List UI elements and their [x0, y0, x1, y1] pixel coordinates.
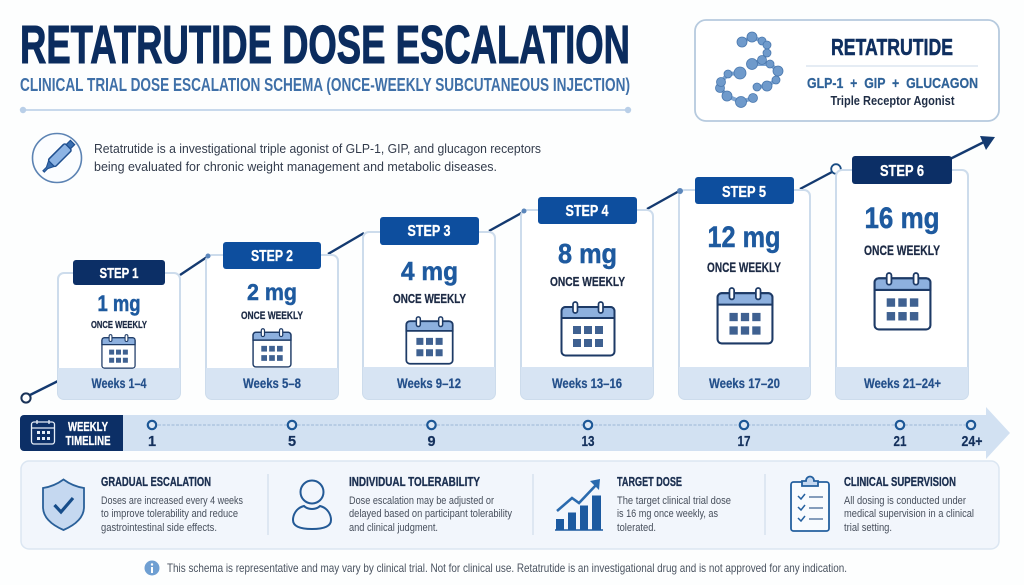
timeline label: WEEKLY	[68, 419, 108, 434]
block: clinical supervision: All dosing is conducted under	[844, 495, 966, 507]
block: clinical supervision	[844, 475, 974, 534]
timeline label	[20, 415, 123, 451]
step card 2: 2 mg	[247, 279, 297, 305]
step card 5	[677, 177, 810, 399]
block: clinical supervision: CLINICAL SUPERVISION	[844, 475, 956, 489]
icon: clipboard checklist	[791, 476, 829, 531]
step card 3: 4 mg	[401, 256, 458, 286]
timeline label: TIMELINE	[66, 433, 111, 448]
intro text	[94, 141, 541, 174]
step card 1: Weeks 1–4	[92, 376, 147, 391]
step card 6: Weeks 21–24+	[864, 376, 941, 391]
block: target dose	[617, 475, 731, 534]
step card 3: STEP 3	[408, 223, 451, 240]
step card 4: Weeks 13–16	[552, 376, 622, 391]
weekly timeline: 9	[427, 434, 436, 450]
step card 2	[206, 242, 338, 399]
icon: calendar	[875, 273, 930, 329]
icon: calendar	[253, 329, 291, 367]
block: gradual escalation	[101, 475, 243, 534]
panel: molecule card	[695, 20, 999, 121]
step card 1: STEP 1	[100, 265, 138, 282]
header divider	[20, 107, 631, 113]
step card 5: 12 mg	[708, 221, 780, 254]
block: gradual escalation: to improve tolerability and reduce	[101, 508, 238, 520]
block: individual tolerability: and clinical judgment.	[349, 522, 438, 534]
intro text: being evaluated for chronic weight management and metabolic diseases.	[94, 159, 497, 174]
panel: key considerations	[21, 461, 999, 549]
panel: molecule card: GLP-1 + GIP + GLUCAGON	[807, 75, 978, 92]
icon: shield	[43, 480, 84, 530]
step card 6	[836, 156, 968, 399]
icon: info	[144, 560, 160, 576]
step card 2: ONCE WEEKLY	[241, 310, 304, 322]
step card 3: ONCE WEEKLY	[393, 291, 466, 306]
step card 2: STEP 2	[251, 248, 293, 265]
weekly timeline	[20, 407, 1010, 459]
icon: calendar	[562, 302, 614, 356]
block: individual tolerability: delayed based on participant tolerability	[349, 508, 512, 520]
escalation path arrow	[21, 136, 995, 403]
weekly timeline: 1	[148, 434, 156, 450]
panel: molecule card: Triple Receptor Agonist	[830, 93, 955, 108]
weekly timeline: 5	[288, 434, 296, 450]
weekly timeline: 24+	[962, 434, 982, 450]
step card 6: 16 mg	[864, 202, 940, 235]
step card 4	[521, 197, 653, 399]
weekly timeline: 17	[738, 434, 750, 450]
block: gradual escalation: gastrointestinal side effects.	[101, 522, 217, 534]
title: RETATRUTIDE DOSE ESCALATION	[20, 15, 630, 75]
subtitle: CLINICAL TRIAL DOSE ESCALATION SCHEMA (ONCE-WEEKLY SUBCUTANEOUS INJECTION)	[20, 75, 630, 95]
block: target dose: TARGET DOSE	[617, 475, 682, 489]
step card 5: ONCE WEEKLY	[707, 260, 781, 275]
step card 5: STEP 5	[722, 184, 766, 201]
weekly timeline: 13	[582, 434, 594, 450]
icon: calendar	[406, 317, 453, 364]
icon: person	[293, 480, 331, 529]
step card 5: Weeks 17–20	[709, 376, 780, 391]
step card 6: ONCE WEEKLY	[864, 243, 940, 258]
weekly timeline: 21	[894, 434, 906, 450]
block: gradual escalation: Doses are increased every 4 weeks	[101, 495, 243, 507]
step card 6: STEP 6	[880, 163, 924, 180]
icon: injection pen	[32, 134, 82, 182]
step card 4: STEP 4	[566, 203, 609, 220]
block: gradual escalation: GRADUAL ESCALATION	[101, 475, 211, 489]
block: individual tolerability: INDIVIDUAL TOLERABILITY	[349, 475, 481, 489]
icon: calendar	[718, 288, 772, 343]
step card 1: ONCE WEEKLY	[91, 319, 147, 331]
step card 1: 1 mg	[98, 291, 140, 316]
icon: peptide molecule	[716, 32, 783, 108]
icon: rising bar chart	[555, 479, 603, 530]
block: individual tolerability: Dose escalation may be adjusted or	[349, 495, 494, 507]
block: individual tolerability	[349, 475, 512, 534]
intro text: Retatrutide is a investigational triple agonist of GLP-1, GIP, and glucagon receptors	[94, 141, 541, 156]
step card 3	[363, 217, 495, 399]
block: target dose: tolerated.	[617, 522, 656, 534]
block: clinical supervision: medical supervision in a clinical	[844, 508, 974, 520]
block: target dose: is 16 mg once weekly, as	[617, 508, 718, 520]
disclaimer: This schema is representative and may vary by clinical trial. Not for clinical use. Retatrutide is an investigational drug and is not approved for any indication.	[167, 561, 847, 575]
step card 4: 8 mg	[558, 238, 617, 269]
step card 3: Weeks 9–12	[397, 376, 461, 391]
step card 4: ONCE WEEKLY	[550, 274, 625, 289]
block: clinical supervision: trial setting.	[844, 522, 892, 534]
step card 2: Weeks 5–8	[243, 376, 301, 391]
panel: molecule card: RETATRUTIDE	[831, 34, 953, 60]
step card 1	[58, 260, 180, 399]
icon: calendar	[102, 335, 135, 368]
block: target dose: The target clinical trial dose	[617, 495, 731, 507]
